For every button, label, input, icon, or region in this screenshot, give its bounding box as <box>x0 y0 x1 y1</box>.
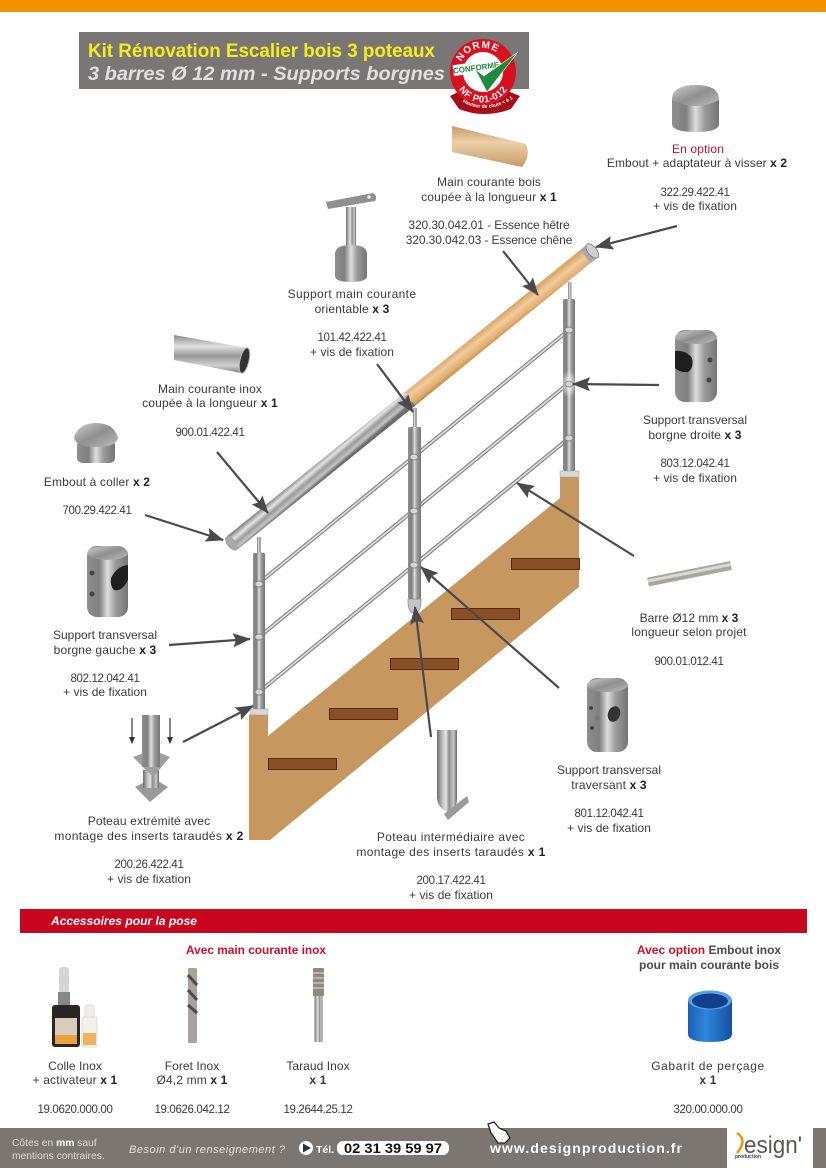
arrow <box>169 639 250 645</box>
handrail low end <box>223 534 240 553</box>
callout: support traversant <box>421 567 661 835</box>
label: + vis de fixation <box>310 345 394 359</box>
icon: glue bottles <box>52 967 97 1047</box>
footer note: mentions contraires. <box>12 1151 105 1162</box>
label: 900.01.422.41 <box>176 427 244 439</box>
subheading: option embout: Avec option <box>637 943 705 957</box>
callout: support transversal gauche <box>53 546 250 699</box>
inox handrail <box>227 392 415 550</box>
stems <box>257 282 572 553</box>
middle post <box>408 427 421 613</box>
icon: right blind support <box>675 330 717 402</box>
callout: support transversal droite <box>573 330 747 485</box>
label: 200.26.422.41 <box>114 859 184 871</box>
staircase stringer <box>249 477 580 840</box>
icon: end cap <box>672 85 719 132</box>
logo <box>727 1128 813 1168</box>
section heading: Accessoires pour la pose <box>50 914 197 928</box>
callout: poteau extrémité <box>54 706 253 886</box>
stair treads <box>268 558 580 770</box>
arrow <box>421 567 559 688</box>
label: + vis de fixation <box>107 872 191 886</box>
callout: embout optionnel <box>596 85 787 247</box>
label: Ø4,2 mm x 1 <box>156 1073 228 1087</box>
label: + vis de fixation <box>653 471 737 485</box>
label: 200.17.422.41 <box>416 875 486 887</box>
right post <box>560 299 579 477</box>
callout: main courante inox <box>142 335 278 513</box>
product: foret inox <box>154 968 230 1116</box>
arrow <box>183 706 253 742</box>
wood handrail <box>405 250 591 406</box>
badge: norme conforme: NORME <box>456 40 500 62</box>
icon: through support <box>587 678 628 752</box>
callout: embout à coller <box>44 423 223 540</box>
label: montage des inserts taraudés x 2 <box>54 829 244 843</box>
label: Support transversal <box>53 628 157 642</box>
footer question: Besoin d'un renseignement ? <box>129 1144 286 1156</box>
cross bars <box>259 330 569 692</box>
label: 900.01.012.41 <box>654 656 724 668</box>
label: montage des inserts taraudés x 1 <box>356 845 546 859</box>
arrow <box>145 515 223 540</box>
label: 101.42.422.41 <box>318 332 386 344</box>
icon: intermediate post <box>437 730 469 820</box>
label: traversant x 3 <box>571 778 647 792</box>
label: En option <box>672 142 724 156</box>
icon: pointing hand <box>488 1122 510 1143</box>
label: Main courante bois <box>437 175 541 189</box>
label: Support transversal <box>557 763 661 777</box>
label: + activateur x 1 <box>33 1073 117 1087</box>
arrow <box>596 226 677 247</box>
label: Taraud Inox <box>286 1059 350 1073</box>
label: 19.2644.25.12 <box>284 1104 352 1116</box>
badge: norme conforme <box>450 39 520 114</box>
label: + vis de fixation <box>409 888 493 902</box>
label: 320.30.042.01 - Essence hêtre <box>408 218 570 232</box>
label: 803.12.042.41 <box>660 458 730 470</box>
section heading <box>20 909 807 933</box>
label: x 1 <box>309 1073 327 1087</box>
product: gabarit de perçage <box>651 990 765 1116</box>
website: www.designproduction.fr <box>489 1140 683 1156</box>
icon: wood handrail piece <box>452 126 528 167</box>
panel: accessoires pour la pose <box>20 909 807 1116</box>
label: 802.12.042.41 <box>70 673 140 685</box>
label: Support transversal <box>643 413 747 427</box>
icon: left blind support <box>87 546 128 617</box>
label: 320.30.042.03 - Essence chêne <box>406 233 573 247</box>
label: Gabarit de perçage <box>651 1059 765 1073</box>
label: coupée à la longueur x 1 <box>142 396 278 410</box>
icon: tap <box>313 968 324 1042</box>
label: Embout + adaptateur à visser x 2 <box>607 156 787 170</box>
label: borgne gauche x 3 <box>54 643 156 657</box>
label: Main courante inox <box>158 382 262 396</box>
callout: barre <box>517 483 747 668</box>
label: longueur selon projet <box>631 625 747 639</box>
handrail steel end cap <box>580 242 601 263</box>
left post <box>250 553 268 715</box>
product: taraud inox <box>284 968 352 1116</box>
phone label: Tél. <box>316 1144 334 1156</box>
railing assembly <box>223 242 601 715</box>
subheading: option embout: pour main courante bois <box>639 958 779 972</box>
logo: production <box>735 1154 761 1160</box>
label: + vis de fixation <box>653 199 737 213</box>
icon: play button <box>299 1141 313 1155</box>
label: Colle Inox <box>48 1059 102 1073</box>
icon: glued end cap <box>74 423 118 463</box>
label: x 1 <box>699 1073 717 1087</box>
arrow <box>573 384 659 385</box>
arrow <box>217 452 268 513</box>
product: colle inox <box>33 967 118 1116</box>
label: + vis de fixation <box>567 821 651 835</box>
callout: main courante bois <box>406 126 573 295</box>
icon: steel bar <box>648 564 731 582</box>
icon: drill bit <box>188 968 197 1043</box>
label: 19.0620.000.00 <box>37 1104 113 1116</box>
subheading: option embout: Embout inox <box>705 943 781 957</box>
label: 700.29.422.41 <box>62 505 132 517</box>
label: Barre Ø12 mm x 3 <box>640 611 738 625</box>
phone number: 02 31 39 59 97 <box>344 1140 442 1156</box>
arrow <box>377 364 413 412</box>
label: Poteau extrémité avec <box>88 814 210 828</box>
bar connectors <box>255 327 573 695</box>
callout: poteau intermédiaire <box>356 607 546 902</box>
arrow <box>517 483 634 556</box>
arrow <box>503 251 538 295</box>
icon: blue drilling jig <box>688 990 732 1042</box>
label: borgne droite x 3 <box>648 428 742 442</box>
footer band <box>0 1122 826 1168</box>
label: Support main courante <box>288 287 416 301</box>
label: 801.12.042.41 <box>574 808 644 820</box>
arrow <box>415 607 431 737</box>
icon: steel tube <box>174 335 252 374</box>
footer note: Côtes en mm sauf <box>12 1138 97 1149</box>
icon: orientable support <box>326 193 376 282</box>
badge: norme conforme: NF P01-012 <box>459 86 507 102</box>
top orange bar <box>0 0 826 12</box>
logo: esign' <box>744 1132 802 1159</box>
callout: support main courante <box>288 193 416 412</box>
title: Kit Rénovation Escalier bois 3 poteaux <box>88 41 435 62</box>
label: coupée à la longueur x 1 <box>421 190 557 204</box>
label: + vis de fixation <box>63 685 147 699</box>
label: Embout à coller x 2 <box>44 475 150 489</box>
label: Poteau intermédiaire avec <box>377 830 525 844</box>
icon: end post with inserts <box>132 715 170 802</box>
badge: norme conforme: CONFORME <box>452 60 501 76</box>
subheading: main courante inox: Avec main courante inox <box>186 943 326 957</box>
label: 19.0626.042.12 <box>154 1104 230 1116</box>
label: 320.00.000.00 <box>674 1104 742 1116</box>
label: Foret Inox <box>165 1059 219 1073</box>
subtitle: 3 barres Ø 12 mm - Supports borgnes <box>88 64 445 85</box>
label: 322.29.422.41 <box>660 187 730 199</box>
label: orientable x 3 <box>315 302 389 316</box>
title block <box>79 32 529 89</box>
